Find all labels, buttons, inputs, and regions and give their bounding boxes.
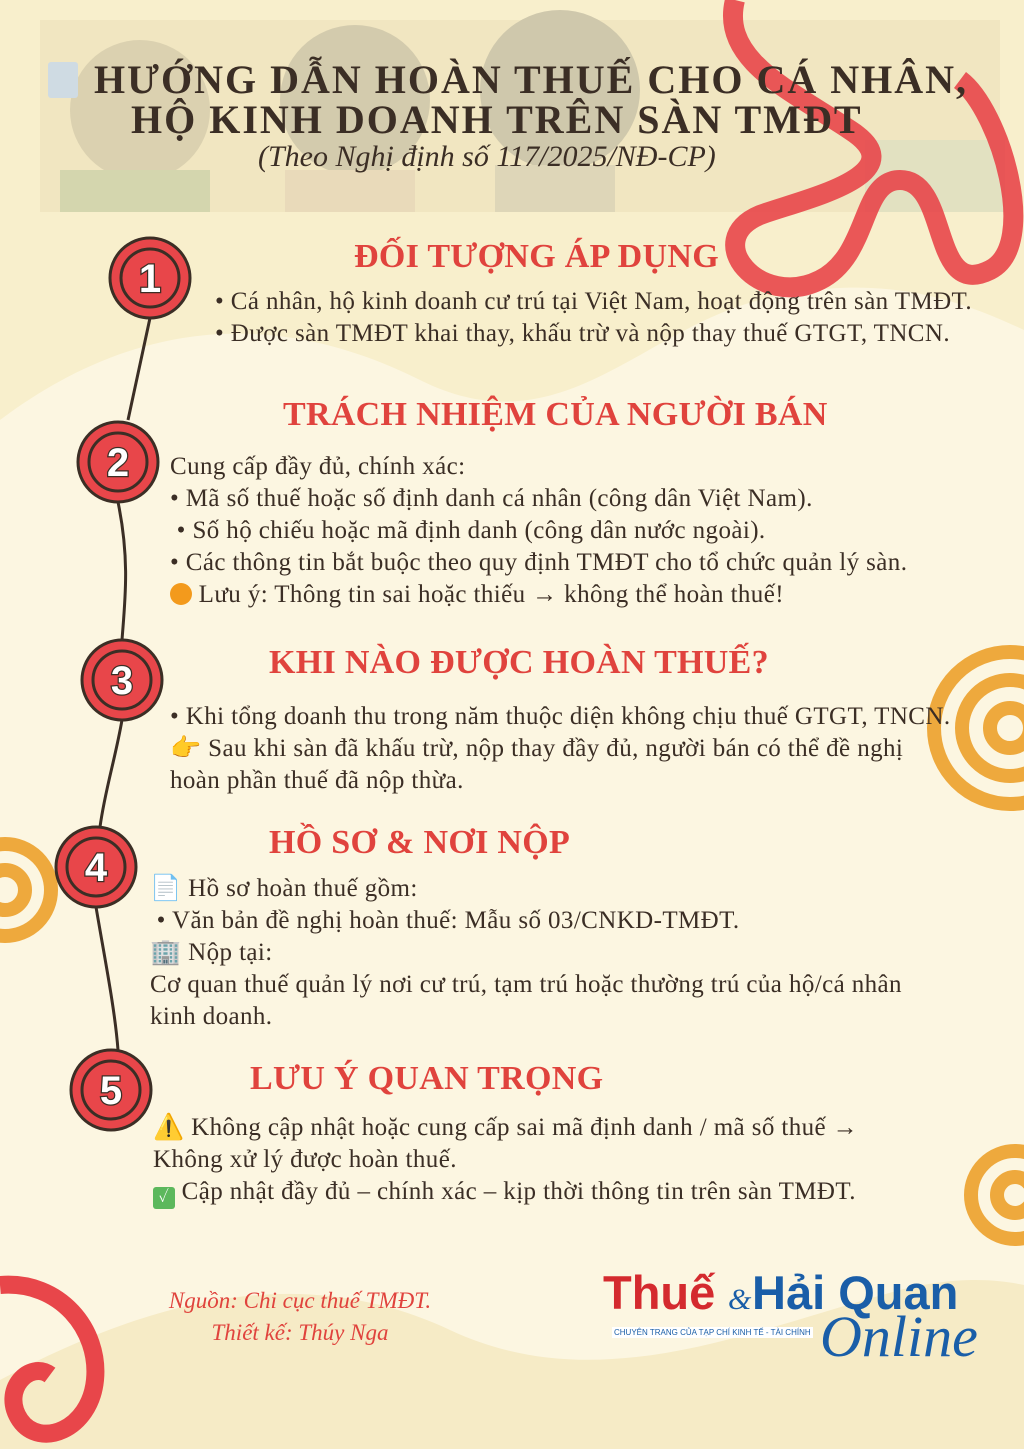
text 1: • Được sàn TMĐT khai thay, khấu trừ và nộp thay thuế GTGT, TNCN. bbox=[215, 320, 950, 347]
text 5: ✓ bbox=[159, 1189, 169, 1206]
heading 5: LƯU Ý QUAN TRỌNG bbox=[250, 1060, 603, 1097]
icon: step circles: 5 bbox=[100, 1069, 122, 1113]
section 2 bbox=[170, 396, 907, 608]
text 4: kinh doanh. bbox=[150, 1003, 272, 1030]
logo: Online bbox=[820, 1304, 978, 1369]
title bbox=[48, 56, 968, 173]
text 4: 🏢 Nộp tại: bbox=[150, 939, 273, 966]
text 2: Cung cấp đầy đủ, chính xác: bbox=[170, 453, 465, 480]
heading 2: TRÁCH NHIỆM CỦA NGƯỜI BÁN bbox=[283, 396, 828, 433]
text 4 bbox=[150, 874, 902, 1030]
text 3: hoàn phần thuế đã nộp thừa. bbox=[170, 767, 464, 794]
text 2: Lưu ý: Thông tin sai hoặc thiếu → không thể hoàn thuế! bbox=[199, 581, 784, 608]
source credits bbox=[168, 1288, 431, 1345]
title: (Theo Nghị định số 117/2025/NĐ-CP) bbox=[258, 140, 716, 173]
section 4 bbox=[150, 822, 902, 1030]
text 3 bbox=[170, 703, 950, 794]
text 3: • Khi tổng doanh thu trong năm thuộc diện không chịu thuế GTGT, TNCN. bbox=[170, 703, 950, 730]
title: HƯỚNG DẪN HOÀN THUẾ CHO CÁ NHÂN, bbox=[94, 57, 968, 102]
icon: step circles: 2 bbox=[107, 441, 129, 485]
icon: step circles: 1 bbox=[139, 257, 161, 301]
heading 3: KHI NÀO ĐƯỢC HOÀN THUẾ? bbox=[269, 644, 769, 681]
text 1: • Cá nhân, hộ kinh doanh cư trú tại Việt Nam, hoạt động trên sàn TMĐT. bbox=[215, 288, 972, 315]
logo: & bbox=[728, 1283, 751, 1316]
logo: CHUYÊN TRANG CỦA TẠP CHÍ KINH TẾ - TÀI CHÍNH bbox=[614, 1328, 811, 1337]
text 4: 📄 Hồ sơ hoàn thuế gồm: bbox=[150, 875, 418, 902]
icon: step circles bbox=[54, 236, 192, 1132]
text 5 bbox=[153, 1112, 858, 1209]
section 3 bbox=[170, 642, 950, 794]
icon: step circles: 3 bbox=[111, 659, 133, 703]
logo: Thuế bbox=[603, 1266, 715, 1319]
section 5 bbox=[153, 1060, 858, 1209]
title: HỘ KINH DOANH TRÊN SÀN TMĐT bbox=[131, 97, 862, 142]
source credits: Nguồn: Chi cục thuế TMĐT. bbox=[169, 1288, 431, 1313]
text 1 bbox=[215, 288, 972, 347]
text 2: • Số hộ chiếu hoặc mã định danh (công dân nước ngoài). bbox=[177, 517, 766, 544]
logo: Hải Quan bbox=[752, 1266, 958, 1319]
text 4: • Văn bản đề nghị hoàn thuế: Mẫu số 03/CNKD-TMĐT. bbox=[157, 907, 740, 934]
icon: document bbox=[48, 62, 78, 98]
text 2 bbox=[170, 453, 907, 608]
icon: step circles: 4 bbox=[85, 846, 108, 890]
text 5: ⚠️ Không cập nhật hoặc cung cấp sai mã định danh / mã số thuế → bbox=[153, 1114, 858, 1141]
text 2: • Các thông tin bắt buộc theo quy định TMĐT cho tổ chức quản lý sàn. bbox=[170, 549, 907, 576]
section 1 bbox=[215, 236, 972, 347]
text 3: 👉 Sau khi sàn đã khấu trừ, nộp thay đầy đủ, người bán có thể đề nghị bbox=[170, 735, 903, 762]
heading 1: ĐỐI TƯỢNG ÁP DỤNG bbox=[354, 238, 719, 275]
text 2: • Mã số thuế hoặc số định danh cá nhân (công dân Việt Nam). bbox=[170, 485, 813, 512]
text 5: Không xử lý được hoàn thuế. bbox=[153, 1146, 457, 1173]
heading 4: HỒ SƠ & NƠI NỘP bbox=[269, 824, 570, 861]
text 5: Cập nhật đầy đủ – chính xác – kịp thời thông tin trên sàn TMĐT. bbox=[182, 1178, 856, 1205]
text 4: Cơ quan thuế quản lý nơi cư trú, tạm trú hoặc thường trú của hộ/cá nhân bbox=[150, 971, 902, 998]
source credits: Thiết kế: Thúy Nga bbox=[212, 1320, 388, 1345]
logo bbox=[603, 1266, 978, 1369]
